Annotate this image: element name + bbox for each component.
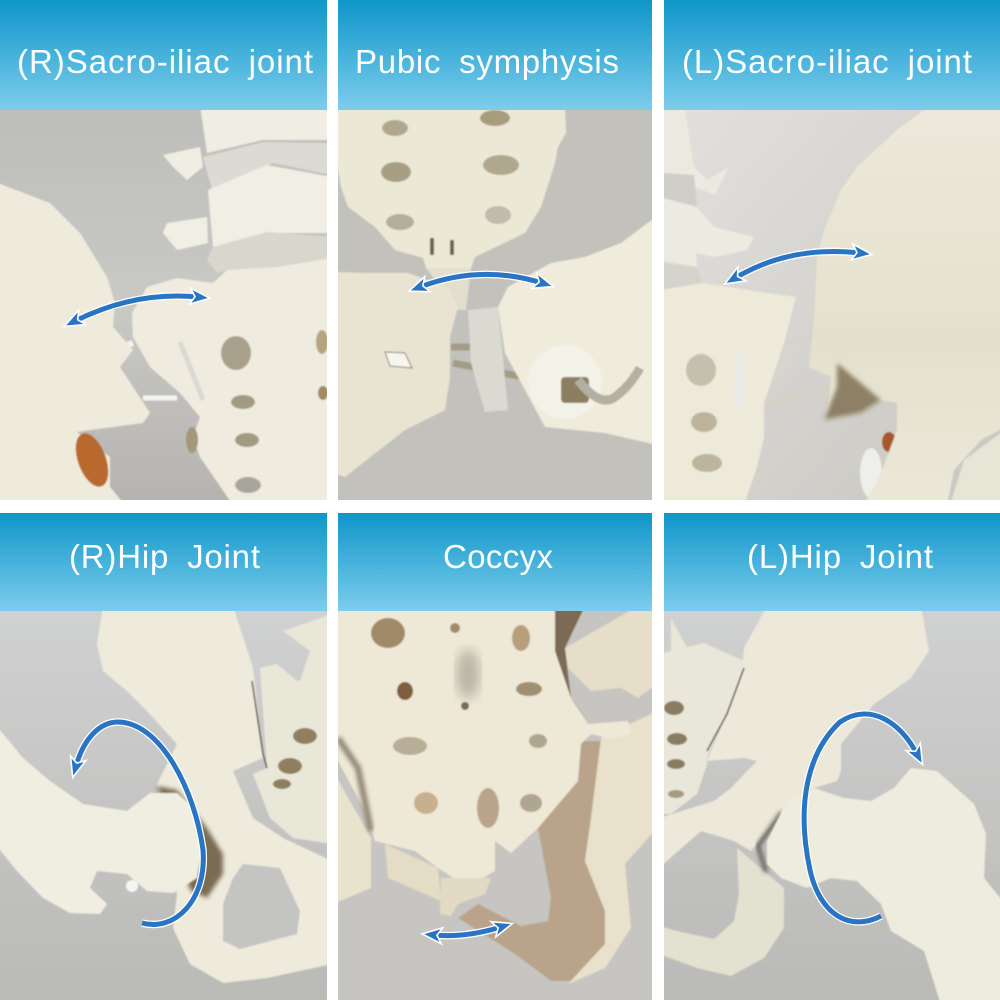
header: (R)Sacro-iliac joint: (R)Sacro-iliac joint: [17, 43, 313, 80]
header: (R)Sacro-iliac joint: [0, 0, 327, 110]
arrow: double-headed blue arrow: [75, 296, 198, 321]
photo: right sacro-iliac joint bones: [0, 105, 332, 505]
header: (L)Hip Joint: (L)Hip Joint: [747, 538, 933, 575]
header: (R)Hip Joint: (R)Hip Joint: [69, 538, 260, 575]
header: (L)Sacro-iliac joint: [664, 0, 1000, 110]
photo: pubic symphysis bones: [333, 105, 657, 505]
header: (L)Hip Joint: [664, 513, 1000, 611]
photo: left sacro-iliac joint bones: [659, 105, 1000, 505]
header: Pubic symphysis: Pubic symphysis: [355, 43, 619, 80]
arrow: double-headed blue arrow: [735, 251, 860, 278]
panel: right hip joint: [0, 513, 332, 1000]
header: Coccyx: Coccyx: [443, 538, 554, 575]
photo: coccyx bones: [333, 606, 657, 1000]
panel: left hip joint: [659, 513, 1000, 1000]
header: (R)Hip Joint: [0, 513, 327, 611]
panel: right sacro-iliac joint: [0, 0, 332, 505]
panel: pubic symphysis: [333, 0, 657, 505]
arrow: curved rotation arrow: [804, 714, 917, 922]
header: (L)Sacro-iliac joint: (L)Sacro-iliac joint: [682, 43, 972, 80]
photo: left hip joint bones: [659, 606, 1000, 1000]
header: Pubic symphysis: [338, 0, 652, 110]
photo: right hip joint bones: [0, 606, 332, 1000]
arrow: curved rotation arrow: [76, 722, 203, 925]
arrow: double-headed blue arrow: [434, 927, 501, 936]
panel: coccyx: [333, 513, 657, 1000]
arrow: double-headed blue arrow: [420, 274, 542, 287]
header: Coccyx: [338, 513, 652, 611]
panel: left sacro-iliac joint: [659, 0, 1000, 505]
